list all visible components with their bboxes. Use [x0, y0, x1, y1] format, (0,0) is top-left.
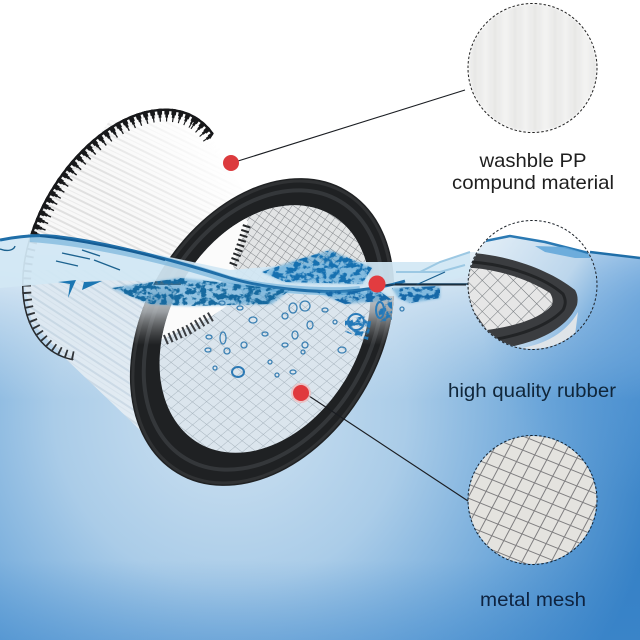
label: washble PP compund material: washble PP — [478, 150, 586, 172]
red marker: mesh — [291, 383, 311, 403]
inset: metal mesh close-up — [468, 435, 598, 565]
small wave marks at left — [0, 246, 120, 270]
right side water sheen — [396, 252, 470, 272]
rubber gasket ring — [130, 178, 394, 486]
foam underlay — [112, 250, 440, 306]
metal mesh inside the ring — [160, 205, 370, 453]
water surface and splash — [0, 235, 640, 340]
red marker: PP material — [223, 155, 239, 171]
inner opening wedge — [162, 218, 248, 340]
filter body upper pleats — [28, 108, 226, 256]
dark wave line — [0, 236, 405, 292]
blue wave body — [30, 238, 360, 291]
inner pleat teeth — [233, 225, 247, 265]
water bubbles — [205, 301, 404, 377]
label: metal mesh: metal mesh — [480, 589, 586, 611]
back rim teeth — [30, 108, 214, 234]
ring fade at waterline — [134, 285, 394, 342]
splash mark — [58, 280, 102, 298]
red marker: rubber — [368, 276, 386, 292]
pale water band — [0, 235, 470, 296]
label: washble PP compund material — [452, 150, 614, 194]
foam clusters — [112, 250, 440, 340]
callout lines — [238, 90, 468, 501]
label: high quality rubber: high quality rubber — [448, 380, 617, 402]
inset: rubber gasket close-up — [468, 220, 598, 350]
background: white top with blue water below — [0, 252, 640, 640]
filter cartridge — [22, 108, 394, 486]
label: washble PP compund material: compund material — [452, 172, 614, 194]
far right wave line — [590, 252, 640, 258]
inset: PP pleats close-up — [468, 4, 597, 132]
filter body lower pleats — [22, 238, 149, 430]
